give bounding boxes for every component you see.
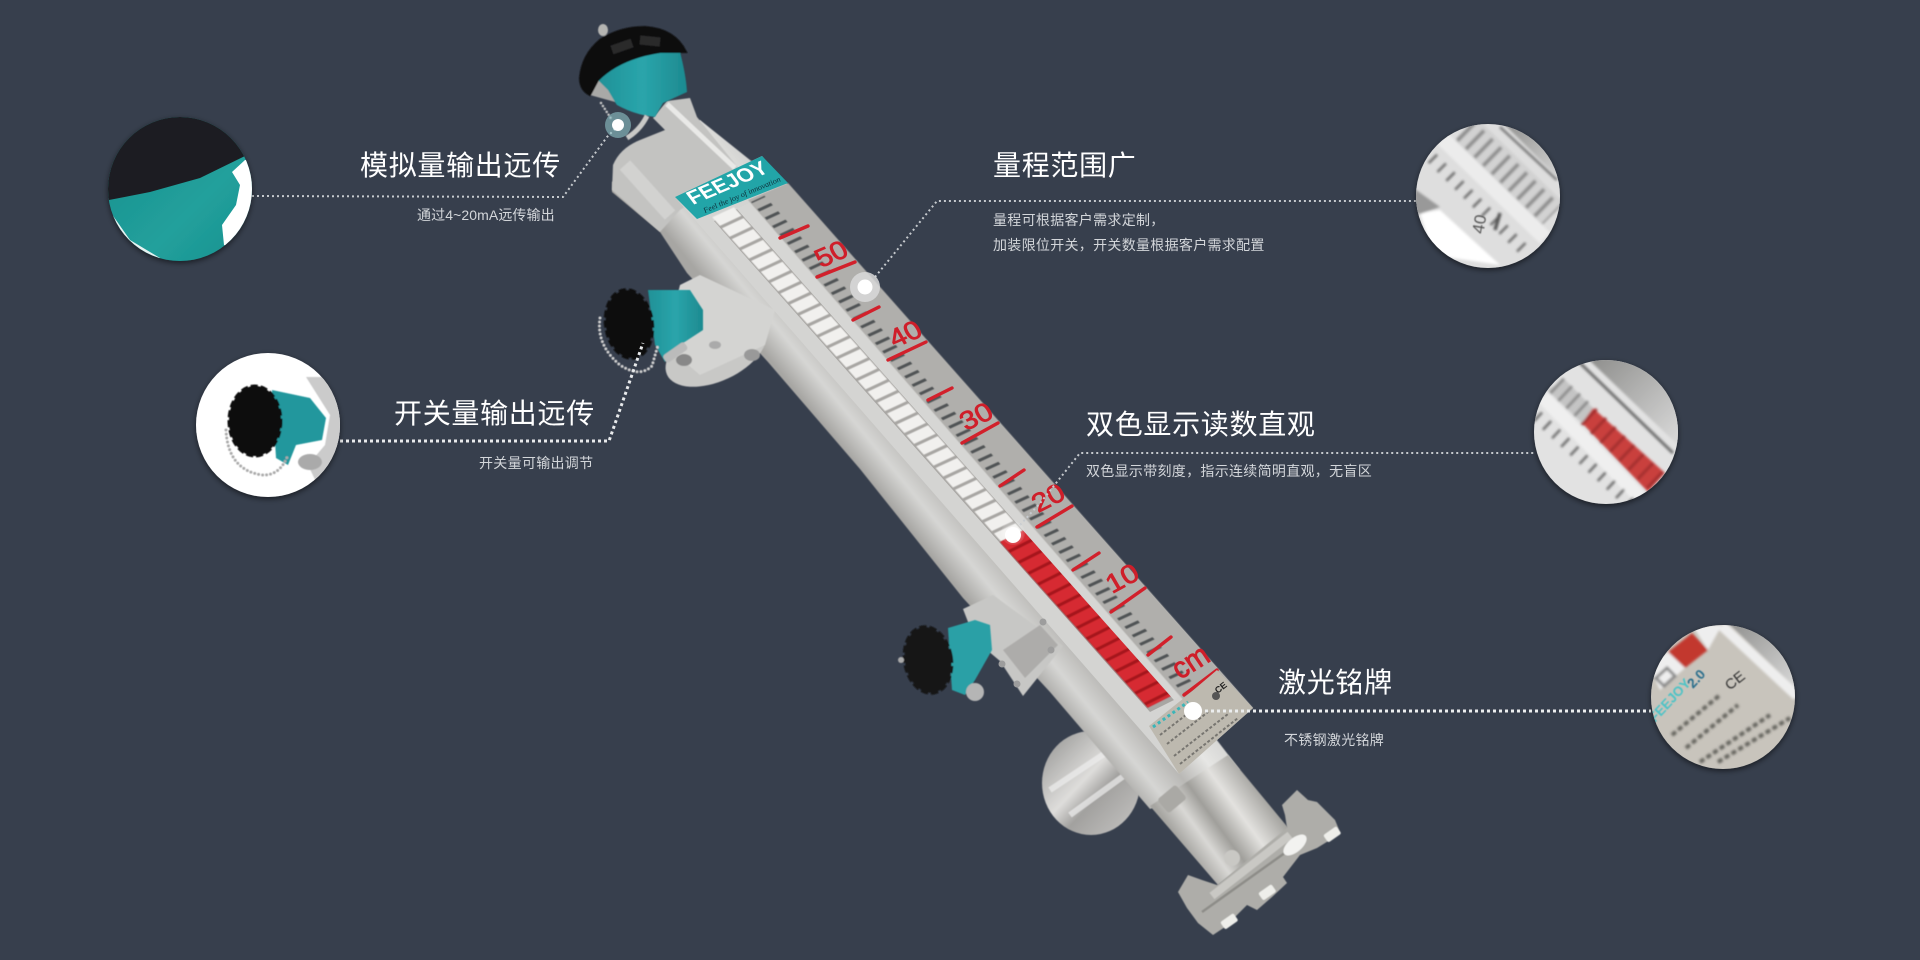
callout: nameplate: 激光铭牌 xyxy=(1278,667,1393,698)
bottom side flange disc xyxy=(1042,731,1140,835)
callout: nameplate xyxy=(1278,667,1393,748)
detail circle: scale xyxy=(1412,120,1570,268)
top transmitter head xyxy=(580,24,687,138)
callout: range xyxy=(993,150,1265,253)
callout dot: nameplate xyxy=(1184,702,1202,720)
lower switch head xyxy=(898,620,992,701)
callout: dual color xyxy=(1086,409,1372,479)
leader line: range xyxy=(875,201,1416,277)
detail circle: nameplate: FEEJOY xyxy=(1646,676,1694,725)
callout: range: 加装限位开关，开关数量根据客户需求配置 xyxy=(993,237,1265,253)
bottom flange with bolts xyxy=(1178,790,1341,935)
detail circle: nameplate: CE xyxy=(1722,668,1749,694)
callout dot: analog output xyxy=(605,112,631,138)
upper switch head xyxy=(599,287,703,372)
gauge: magnetic flap level meter xyxy=(580,24,1341,935)
teal brand label: FEEJOY xyxy=(682,158,773,209)
detail circle: scale: 40 xyxy=(1468,213,1490,235)
laser nameplate: CE xyxy=(1213,680,1229,695)
callout: analog output: 模拟量输出远传 xyxy=(360,150,561,181)
detail circle: nameplate: 2.0 xyxy=(1683,666,1709,691)
leader line: nameplate xyxy=(1193,710,1651,712)
grey scale plate xyxy=(748,183,1253,736)
callout: range: 量程范围广 xyxy=(993,150,1137,181)
teal brand label xyxy=(675,156,788,219)
detail circle: analog head xyxy=(106,116,254,265)
leader line: analog output xyxy=(252,126,618,197)
callout: dual color: 双色显示读数直观 xyxy=(1086,409,1316,440)
white flaps xyxy=(723,212,1012,536)
callout: dual color: 双色显示带刻度，指示连续简明直观，无盲区 xyxy=(1086,463,1372,479)
red flaps xyxy=(1000,530,1173,708)
front face xyxy=(675,156,1253,774)
main tube xyxy=(612,120,1240,809)
callout: switch output xyxy=(394,398,595,471)
scale numbers: 20 xyxy=(1026,478,1070,518)
scale numbers: 30 xyxy=(954,397,998,436)
scale numbers xyxy=(809,235,1216,686)
callout: nameplate: 不锈钢激光铭牌 xyxy=(1284,732,1384,748)
minor ticks xyxy=(758,199,1191,692)
callout: switch output: 开关量可输出调节 xyxy=(479,455,593,471)
flap channel xyxy=(714,209,1174,712)
callout: analog output xyxy=(360,150,561,223)
lower switch bracket xyxy=(963,595,1063,696)
callout: analog output: 通过4~20mA远传输出 xyxy=(417,207,555,223)
callout dot: dual color xyxy=(1001,521,1025,545)
callout dot: range xyxy=(850,272,880,302)
callout: range: 量程可根据客户需求定制， xyxy=(993,212,1165,228)
lower bracket bolts xyxy=(998,618,1054,688)
scale numbers: cm xyxy=(1165,638,1216,686)
detail circle: switch head xyxy=(196,353,345,497)
top chamber xyxy=(612,98,740,232)
switch flange upper xyxy=(655,275,777,401)
callout: switch output: 开关量输出远传 xyxy=(394,398,595,429)
lower tube xyxy=(1150,755,1290,885)
scale numbers: 50 xyxy=(809,235,853,273)
detail circle: nameplate xyxy=(1646,620,1800,769)
leader line: switch output xyxy=(340,343,643,441)
center rail xyxy=(737,202,1186,700)
detail circle: dual color flaps xyxy=(1534,358,1680,504)
leader line: dual color xyxy=(1020,453,1534,525)
scale numbers: 10 xyxy=(1100,557,1144,599)
teal brand label: Feel the joy of innovation xyxy=(701,175,782,215)
laser nameplate xyxy=(1149,670,1253,774)
scale numbers: 40 xyxy=(883,315,927,353)
major red ticks xyxy=(780,226,1217,695)
